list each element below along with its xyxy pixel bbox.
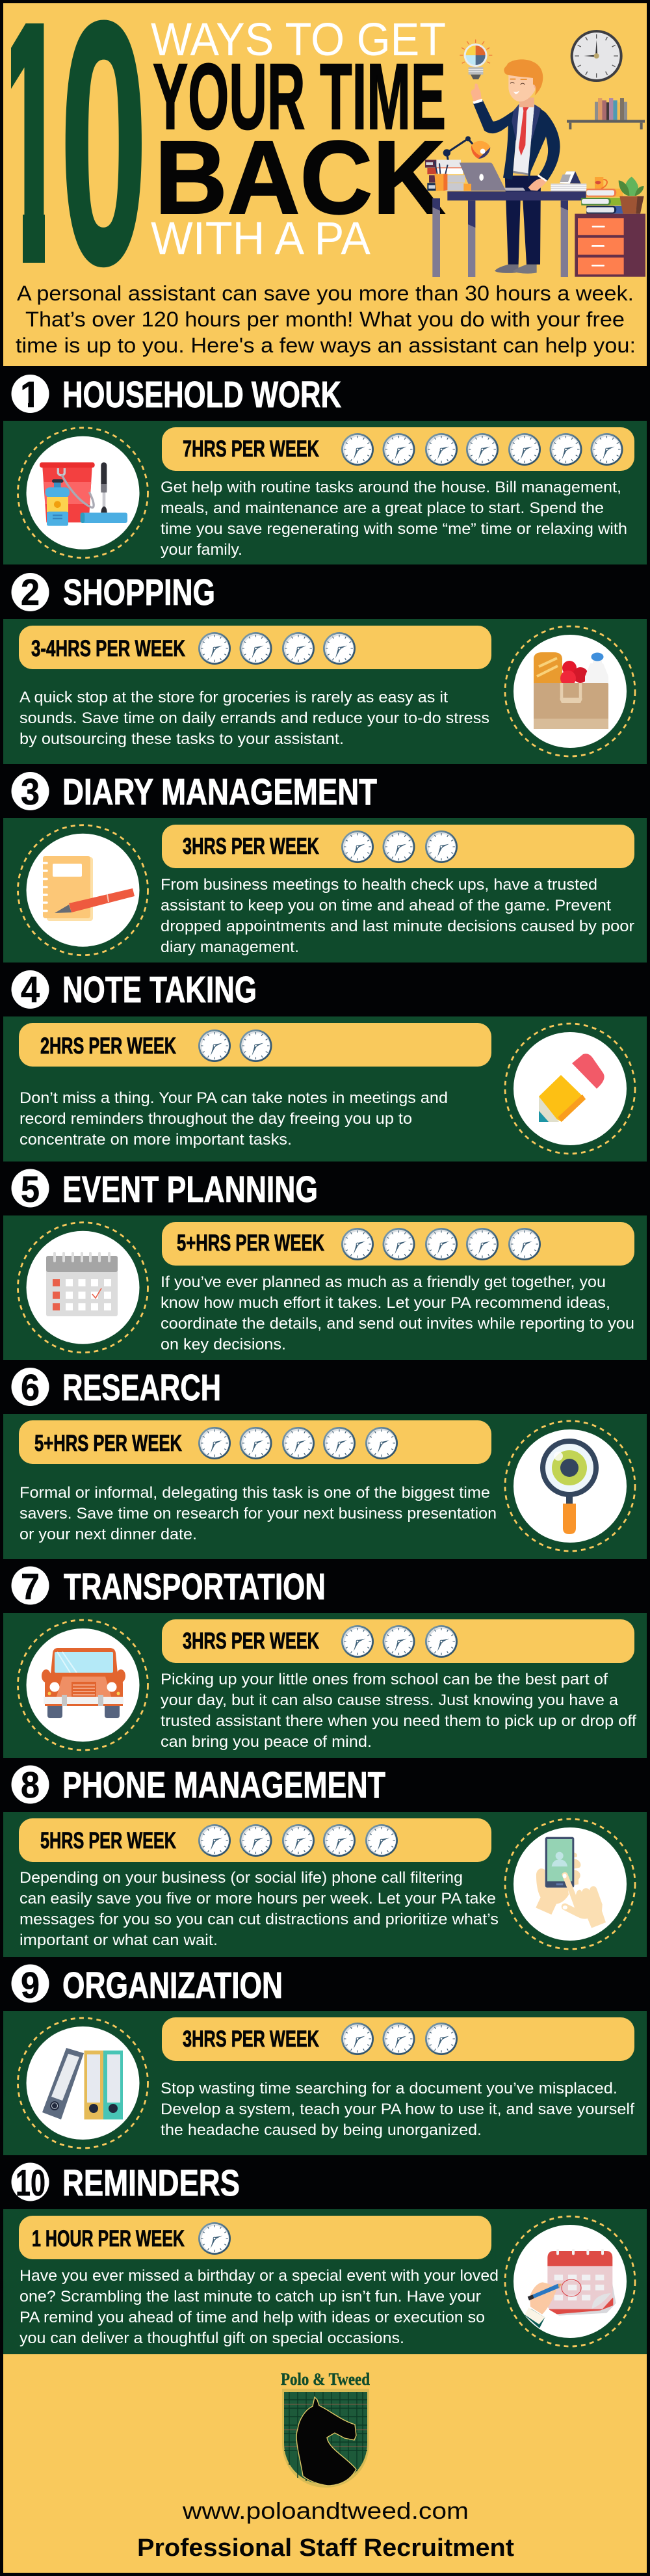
logo shield <box>282 2389 369 2488</box>
time pill: 7HRS PER WEEK <box>183 436 319 462</box>
body text <box>20 2267 499 2347</box>
heading: ways to get: WAYS TO GET <box>151 14 446 66</box>
desk top <box>447 191 586 200</box>
icon circle: calendar <box>18 1223 148 1353</box>
time pill: 3HRS PER WEEK <box>183 1628 319 1654</box>
time pill <box>19 1818 491 1862</box>
heading: HOUSEHOLD WORK <box>62 374 341 416</box>
body text: assistant to keep you on time and ahead of the game. Prevent <box>161 897 611 914</box>
body text: trusted assistant there when you need them to pick up or drop off <box>161 1712 636 1730</box>
number badge 3 <box>12 771 49 813</box>
panel: shopping <box>3 619 647 764</box>
body text: Stop wasting time searching for a document you’ve misplaced. <box>161 2080 618 2097</box>
body text: can bring you peace of mind. <box>161 1733 372 1751</box>
clock icons: 2 <box>198 1029 272 1062</box>
section 8: phone management <box>3 1764 647 1957</box>
time pill <box>162 1619 634 1663</box>
number badge 3: 3 <box>21 771 40 813</box>
time pill <box>19 2216 491 2259</box>
panel: research <box>3 1414 647 1559</box>
number badge 1 <box>12 374 49 416</box>
body text: concentrate on more important tasks. <box>20 1131 292 1149</box>
logo wordmark: Polo & Tweed <box>281 2370 370 2389</box>
icon circle: calendar reminder <box>505 2216 635 2346</box>
clock icons: 3 <box>341 1625 458 1658</box>
panel: household work <box>3 421 647 564</box>
clock icons: 7 <box>341 433 623 466</box>
icon circle: phone in hands <box>505 1819 635 1949</box>
number badge 6 <box>12 1367 49 1409</box>
time pill: 2HRS PER WEEK <box>40 1033 176 1059</box>
heading: PHONE MANAGEMENT <box>62 1764 385 1806</box>
body text: your family. <box>161 541 242 559</box>
body text <box>161 2080 634 2139</box>
icon: paper stack and calculator <box>551 171 586 191</box>
section 2: shopping <box>3 572 647 764</box>
icon circle: magnifier and eye <box>505 1421 635 1551</box>
heading: EVENT PLANNING <box>62 1169 318 1210</box>
icon circle: car <box>18 1620 148 1750</box>
icon: desk <box>432 198 568 277</box>
icon circle: binders <box>18 2018 148 2148</box>
icon: desk lamp <box>443 136 490 161</box>
body text: important or what can wait. <box>20 1932 218 1949</box>
body text: From business meetings to health check ups, have a trusted <box>161 876 597 894</box>
body text: can easily save you five or more hours per week. Let your PA take <box>20 1890 496 1907</box>
clock icons: 1 <box>198 2222 231 2255</box>
time pill: 3-4HRS PER WEEK <box>31 636 185 661</box>
heading: with a pa: WITH A PA <box>151 213 371 265</box>
time pill <box>19 626 491 669</box>
body text: diary management. <box>161 938 299 956</box>
body text: one? Scrambling the last minute to catch up isn’t fun. Have your <box>20 2288 481 2305</box>
time pill: 1 HOUR PER WEEK <box>32 2226 185 2251</box>
number badge 9: 9 <box>21 1965 40 2006</box>
heading: back: BACK <box>155 119 445 235</box>
number badge 8 <box>12 1764 49 1806</box>
number badge 1: 1 <box>20 374 40 416</box>
body text: Depending on your business (or social life) phone call filtering <box>20 1869 463 1887</box>
heading: TRANSPORTATION <box>64 1566 326 1608</box>
body text: Don’t miss a thing. Your PA can take notes in meetings and <box>20 1089 448 1107</box>
panel: note taking <box>3 1016 647 1162</box>
icon: filing cabinet <box>575 214 645 277</box>
body text: record reminders throughout the day freeing you up to <box>20 1110 412 1128</box>
section 6: research <box>3 1367 647 1559</box>
icon: book pile <box>581 189 624 214</box>
icon circle: notebook and pen <box>18 825 148 955</box>
body text <box>161 479 627 559</box>
body text: Develop a system, teach your PA how to use it, and save yourself <box>161 2101 634 2118</box>
icon circle: cleaning supplies <box>18 428 148 558</box>
panel: header <box>0 0 647 366</box>
body text <box>161 1671 636 1751</box>
time pill: 5HRS PER WEEK <box>40 1828 176 1853</box>
number badge 8: 8 <box>21 1764 40 1806</box>
body text: savers. Save time on research for your next business presentation <box>20 1505 497 1522</box>
tagline: Professional Staff Recruitment <box>137 2534 514 2562</box>
body text: meals, and maintenance are a great place to start. Spend the <box>161 499 604 517</box>
body text: know how much effort it takes. Let your PA recommend ideas, <box>161 1294 610 1312</box>
intro text: time is up to you. Here's a few ways an assistant can help you: <box>16 334 636 357</box>
body text: Formal or informal, delegating this task is one of the biggest time <box>20 1484 490 1502</box>
panel: phone management <box>3 1812 647 1957</box>
body text <box>161 876 634 956</box>
big number 10 <box>11 20 142 268</box>
icon: potted plant <box>619 177 644 214</box>
body text: Have you ever missed a birthday or a special event with your loved <box>20 2267 499 2285</box>
heading: REMINDERS <box>62 2162 240 2204</box>
clock icons: 3 <box>341 2023 458 2055</box>
time pill <box>162 427 634 471</box>
number badge 9 <box>12 1964 49 2006</box>
number badge 10: 10 <box>16 2162 46 2204</box>
time pill <box>162 2017 634 2061</box>
body text: you can deliver a thoughtful gift on special occasions. <box>20 2330 404 2347</box>
body text: on key decisions. <box>161 1336 286 1353</box>
number badge 5 <box>12 1169 49 1210</box>
illustration: office scene <box>425 30 645 277</box>
section 1: household work <box>3 374 647 564</box>
body text <box>20 1089 448 1149</box>
body text <box>20 1484 497 1543</box>
section 4: note taking <box>3 969 647 1162</box>
body text: dropped appointments and last minute decisions caused by poor <box>161 918 634 935</box>
body text: your day, but it can also cause stress. Just knowing you have a <box>161 1692 619 1709</box>
panel: reminders <box>3 2209 647 2354</box>
panel: diary management <box>3 818 647 963</box>
icon circle: pencil <box>505 1024 635 1154</box>
section 10: reminders <box>3 2162 647 2354</box>
number badge 7: 7 <box>21 1566 40 1608</box>
number badge 2: 2 <box>21 572 40 613</box>
section 7: transportation <box>3 1566 647 1758</box>
intro text: That’s over 120 hours per month! What you do with your free <box>25 308 625 331</box>
body text: sounds. Save time on daily errands and reduce your to-do stress <box>20 710 489 727</box>
body text: the headache caused by being unorganized. <box>161 2121 482 2139</box>
panel: organization <box>3 2011 647 2155</box>
heading: ORGANIZATION <box>62 1965 283 2006</box>
icon: mug <box>595 177 607 189</box>
clock icons: 5 <box>341 1228 541 1260</box>
body text: by outsourcing these tasks to your assistant. <box>20 730 344 748</box>
panel: footer <box>3 2354 647 2573</box>
body text <box>161 1273 634 1353</box>
number badge 7 <box>12 1566 49 1608</box>
panel: event planning <box>3 1215 647 1360</box>
body text: or your next dinner date. <box>20 1526 197 1543</box>
clock icons: 4 <box>198 632 356 665</box>
panel: transportation <box>3 1613 647 1758</box>
number badge 4: 4 <box>21 969 40 1011</box>
body text <box>20 1869 499 1949</box>
heading: DIARY MANAGEMENT <box>62 771 377 813</box>
illustration: man in suit <box>471 59 560 274</box>
icon: wall clock <box>571 30 623 82</box>
section 9: organization <box>3 1964 647 2155</box>
time pill <box>162 825 634 868</box>
intro text: A personal assistant can save you more than 30 hours a week. <box>17 282 634 305</box>
clock icons: 5 <box>198 1824 398 1857</box>
body text <box>20 689 489 748</box>
body text: PA remind you ahead of time and help with ideas or execution so <box>20 2309 485 2326</box>
intro text <box>16 282 636 357</box>
clock icons: 3 <box>341 830 458 863</box>
body text: coordinate the details, and send out invites while reporting to you <box>161 1315 634 1333</box>
body text: messages for you so you can cut distractions and prioritize what’s <box>20 1911 499 1928</box>
icon: stacked books <box>425 160 465 191</box>
body text: If you’ve ever planned as much as a friendly get together, you <box>161 1273 606 1291</box>
heading: SHOPPING <box>63 572 215 613</box>
website url: www.poloandtweed.com <box>182 2497 469 2524</box>
section 3: diary management <box>3 771 647 963</box>
time pill: 3HRS PER WEEK <box>183 834 319 859</box>
heading: NOTE TAKING <box>62 969 257 1011</box>
icon: laptop <box>460 163 525 191</box>
time pill: 5+HRS PER WEEK <box>34 1431 182 1456</box>
clock icons: 5 <box>198 1427 398 1459</box>
number badge 5: 5 <box>21 1169 40 1210</box>
body text: A quick stop at the store for groceries is rarely as easy as it <box>20 689 448 706</box>
body text: Get help with routine tasks around the house. Bill management, <box>161 479 621 496</box>
time pill <box>19 1420 491 1464</box>
number badge 4 <box>12 969 49 1011</box>
body text: Picking up your little ones from school can be the best part of <box>161 1671 608 1688</box>
icon circle: grocery bag <box>505 626 635 756</box>
number badge 6: 6 <box>21 1367 40 1409</box>
time pill: 3HRS PER WEEK <box>183 2026 319 2052</box>
body text: time you save regenerating with some “me” time or relaxing with <box>161 520 627 538</box>
time pill <box>162 1222 634 1266</box>
time pill <box>19 1023 491 1067</box>
icon: light bulb <box>460 40 492 79</box>
heading: RESEARCH <box>62 1367 221 1409</box>
icon: shelf with books <box>567 98 645 129</box>
time pill: 5+HRS PER WEEK <box>177 1230 324 1256</box>
number badge 2 <box>12 572 49 613</box>
section 5: event planning <box>3 1169 647 1360</box>
